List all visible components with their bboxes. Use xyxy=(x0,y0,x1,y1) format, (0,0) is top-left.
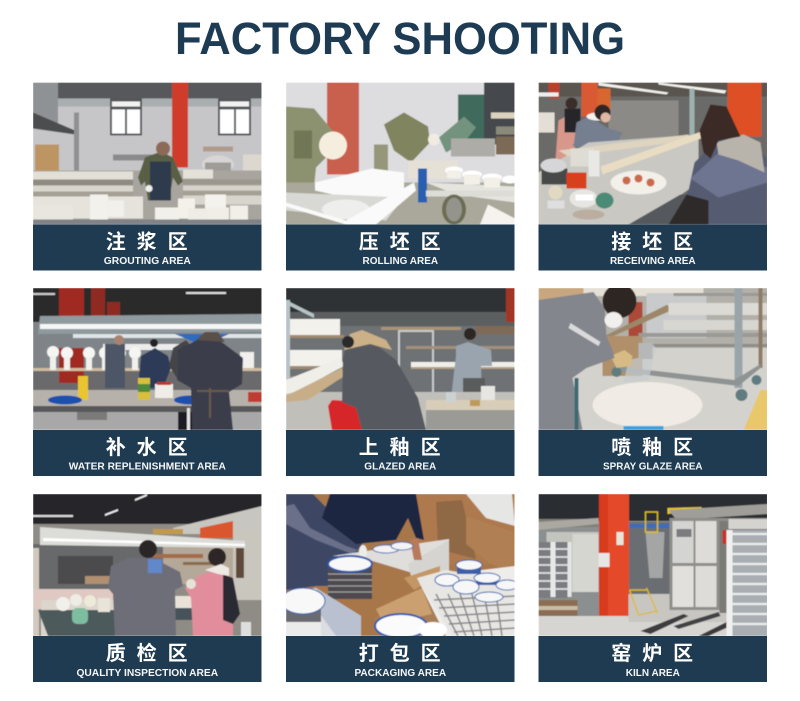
photo: kiln room xyxy=(538,494,768,636)
panel: grouting area xyxy=(33,82,262,270)
panel: water replenishment area xyxy=(33,288,263,476)
label bar xyxy=(538,224,767,270)
chinese label: 打包区 xyxy=(359,642,452,665)
photo: quality inspectors xyxy=(33,494,262,636)
photo: rolling machines xyxy=(286,82,518,224)
english label: GROUTING AREA xyxy=(104,255,191,267)
english label: QUALITY INSPECTION AREA xyxy=(76,667,219,679)
panel: glazed area xyxy=(286,288,515,476)
english label: ROLLING AREA xyxy=(363,255,438,267)
label bar xyxy=(286,430,514,476)
english label: SPRAY GLAZE AREA xyxy=(603,461,703,473)
label bar xyxy=(33,224,262,270)
english label: KILN AREA xyxy=(626,667,680,679)
title: FACTORY SHOOTING xyxy=(175,13,625,64)
label bar xyxy=(286,224,514,270)
chinese label: 喷釉区 xyxy=(611,436,704,459)
english label: RECEIVING AREA xyxy=(610,255,696,267)
label bar xyxy=(33,636,262,682)
photo: glazing workers xyxy=(286,288,515,430)
chinese label: 压坯区 xyxy=(359,230,452,254)
panel: spray glaze area xyxy=(538,284,768,476)
photo: spray glazing worker xyxy=(538,284,768,430)
panel: rolling area xyxy=(286,82,518,270)
english label: WATER REPLENISHMENT AREA xyxy=(69,461,226,473)
label bar xyxy=(538,636,767,682)
english label: PACKAGING AREA xyxy=(354,667,447,679)
label bar xyxy=(33,430,262,476)
panel: packaging area xyxy=(281,494,518,682)
panel: kiln area xyxy=(538,494,768,682)
panel: quality inspection area xyxy=(33,494,262,682)
chinese label: 补水区 xyxy=(106,436,199,459)
photo: packing plates into crates xyxy=(281,494,518,638)
label bar xyxy=(286,636,514,682)
photo: grouting workshop xyxy=(33,82,262,224)
english label: GLAZED AREA xyxy=(364,461,437,473)
chinese label: 上釉区 xyxy=(359,436,452,459)
photo: water replenishment workbench xyxy=(33,288,263,430)
panel: receiving area xyxy=(538,82,768,270)
chinese label: 质检区 xyxy=(106,641,199,665)
label bar xyxy=(538,430,767,476)
chinese label: 接坯区 xyxy=(611,230,704,254)
chinese label: 注浆区 xyxy=(106,230,199,254)
photo: workers trimming pieces xyxy=(538,82,768,224)
chinese label: 窑炉区 xyxy=(611,642,704,665)
